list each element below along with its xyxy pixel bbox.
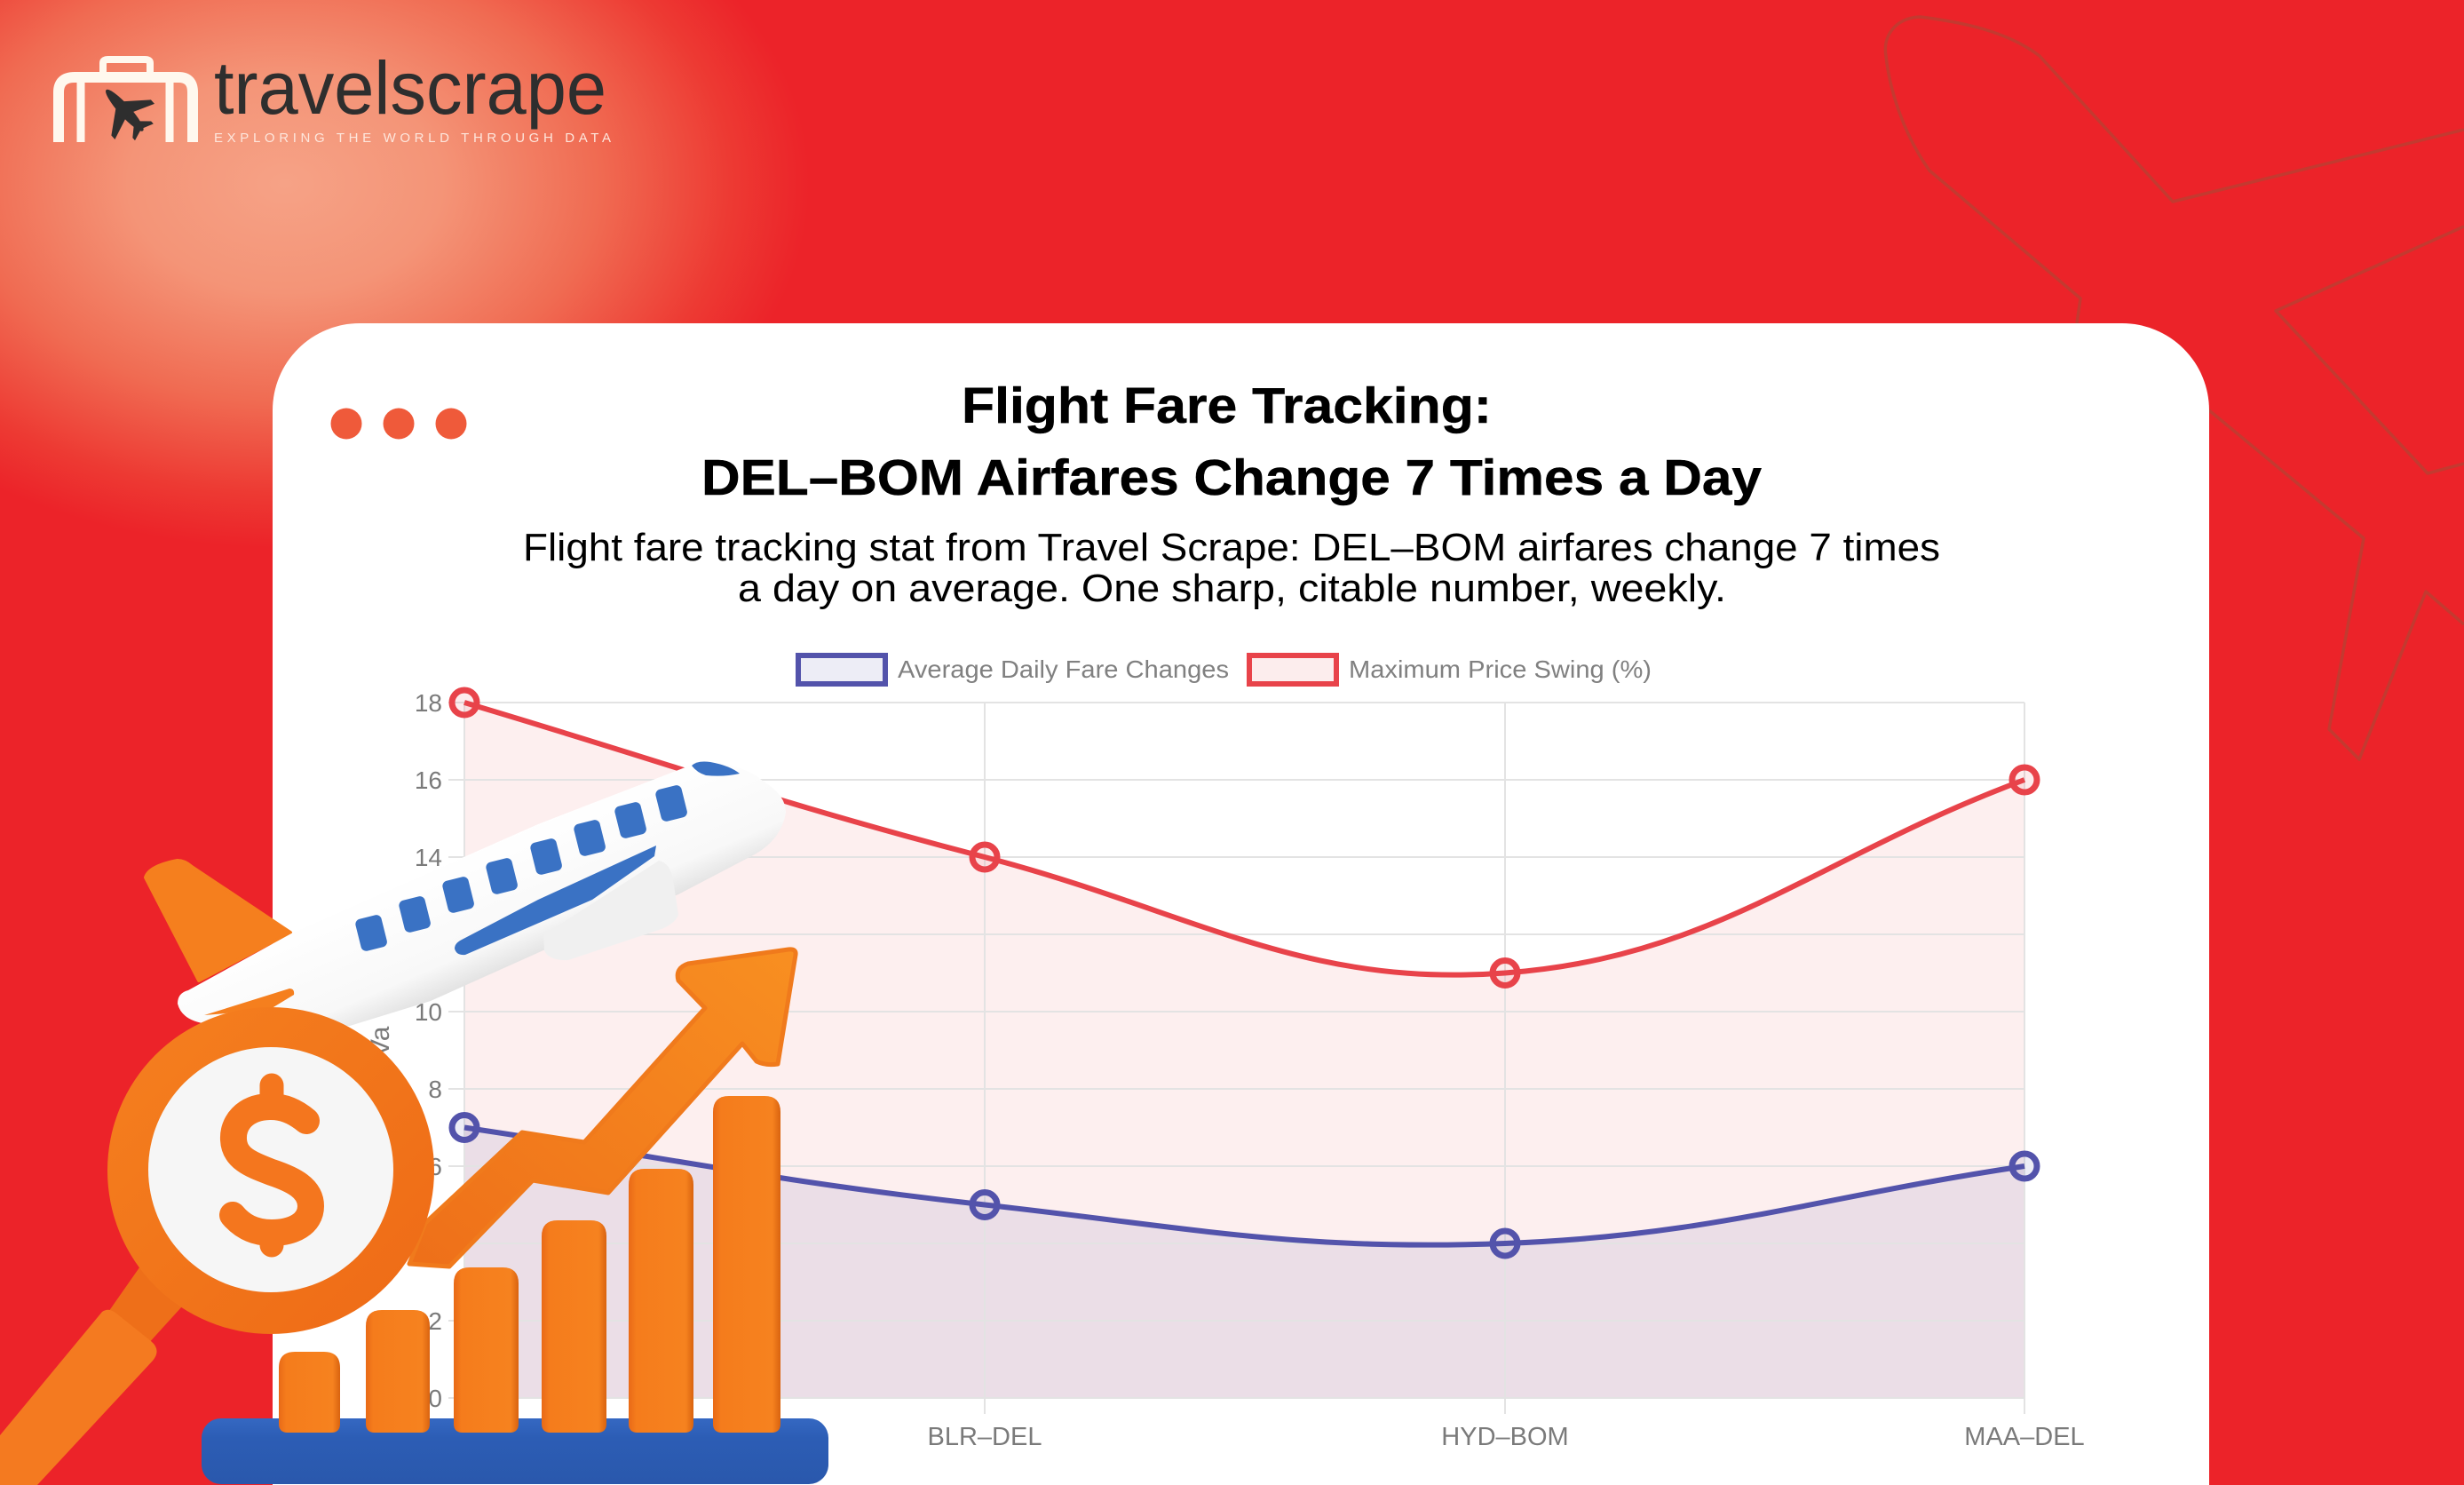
wing [455, 846, 656, 955]
cockpit window [692, 762, 740, 776]
y axis labels: 10 [415, 998, 442, 1026]
chart area fills [464, 703, 2024, 1398]
x axis labels: MAA–DEL [1964, 1423, 2085, 1451]
lens ring [107, 1007, 434, 1334]
x axis labels: DEL–BOM [403, 1423, 526, 1451]
background airplane outline [1885, 17, 2464, 759]
fuselage [178, 763, 786, 1026]
illustration: rising arrow [409, 949, 796, 1267]
windows [354, 784, 688, 952]
handle [0, 1261, 191, 1485]
y axis labels: 4 [428, 1230, 442, 1258]
title [701, 377, 1762, 506]
bars [279, 1096, 780, 1433]
logo: travelscrape [59, 46, 611, 150]
lens [148, 1047, 393, 1292]
dollar sign [233, 1085, 311, 1245]
x axis labels: HYD–BOM [1441, 1423, 1569, 1451]
window dots [330, 409, 467, 439]
x axis labels: BLR–DEL [928, 1423, 1042, 1451]
y axis labels: 2 [428, 1307, 442, 1335]
y axis labels: 0 [428, 1385, 442, 1412]
legend [798, 655, 1652, 684]
panel: white card [273, 323, 2209, 1485]
base platform [202, 1418, 828, 1484]
illustration: bar chart [202, 1096, 828, 1484]
line chart [366, 689, 2085, 1451]
logo wordmark: travelscrape [214, 46, 606, 130]
y axis labels: 8 [428, 1076, 442, 1103]
legend: Average Daily Fare Changes [898, 655, 1229, 683]
title: Flight Fare Tracking: [962, 377, 1492, 434]
legend: Maximum Price Swing (%) [1349, 655, 1652, 683]
illustration: magnifying glass with dollar [0, 1007, 434, 1485]
subtitle [523, 526, 1940, 610]
series: maximum price swing [452, 690, 2037, 986]
y axis title fragment: Va [366, 1026, 395, 1057]
x axis labels [403, 1423, 2085, 1451]
title: DEL–BOM Airfares Change 7 Times a Day [701, 449, 1762, 506]
series: average daily fare changes [452, 1116, 2037, 1256]
engine [543, 861, 678, 960]
y axis labels [415, 689, 442, 1412]
icon: suitcase with plane [59, 60, 193, 150]
logo tagline: EXPLORING THE WORLD THROUGH DATA [214, 131, 611, 146]
stabilizer [204, 989, 294, 1015]
y axis labels: 16 [415, 766, 442, 794]
y axis labels: 14 [415, 844, 442, 871]
tail fin [146, 861, 290, 981]
y axis labels: 6 [428, 1153, 442, 1180]
illustration: airplane [146, 762, 786, 1026]
subtitle: a day on average. One sharp, citable number, weekly. [738, 567, 1726, 610]
y axis labels: 18 [415, 689, 442, 717]
y axis labels: 12 [415, 921, 442, 949]
subtitle: Flight fare tracking stat from Travel Scrape: DEL–BOM airfares change 7 times [523, 526, 1940, 569]
